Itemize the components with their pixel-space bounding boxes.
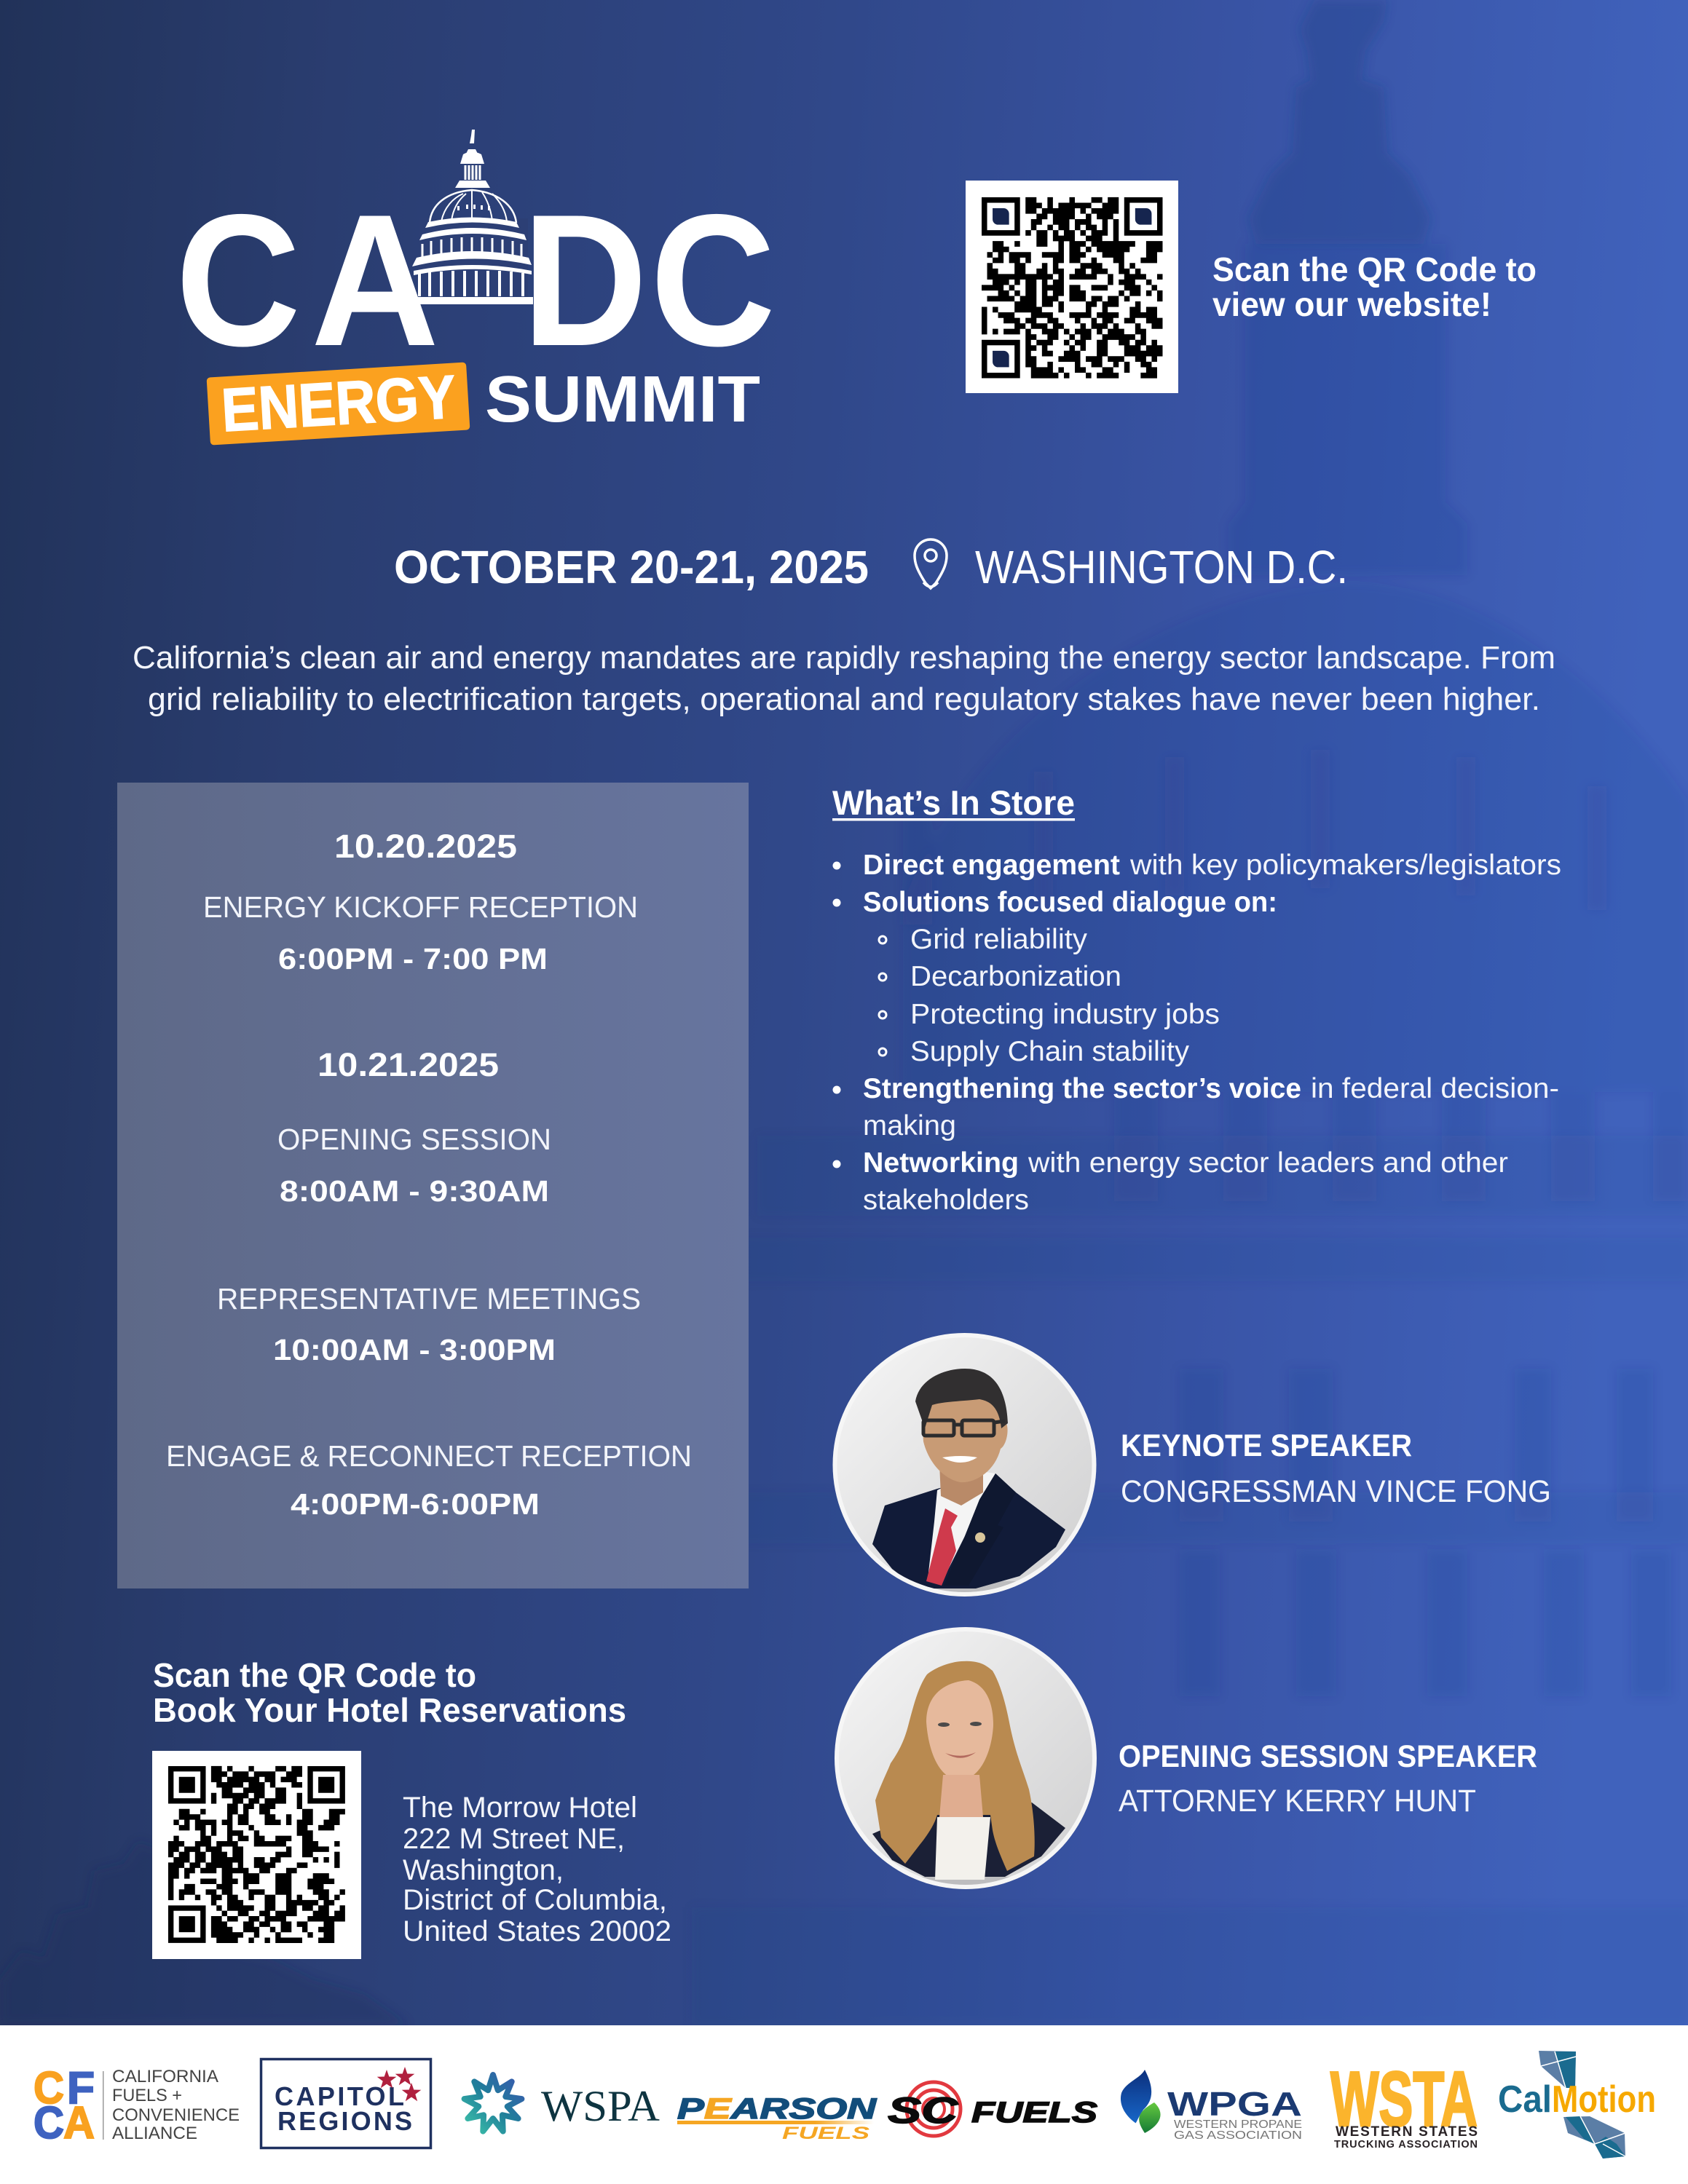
bullet list: Protecting industry jobs — [910, 999, 1220, 1030]
hotel address — [403, 1792, 671, 1947]
logo: Capitol Regions — [261, 2059, 431, 2148]
icon: location pin — [915, 539, 947, 588]
bullet list: making — [863, 1110, 956, 1142]
logo: WSTA: TRUCKING ASSOCIATION — [1334, 2139, 1478, 2151]
schedule: representative meetings — [217, 1282, 641, 1366]
schedule: October 20 kickoff: 6:00PM - 7:00 PM — [278, 942, 548, 976]
logo: CFCA: CONVENIENCE — [112, 2105, 240, 2125]
logo: WSTA: WESTERN STATES — [1336, 2124, 1478, 2140]
speaker: opening session: OPENING SESSION SPEAKER — [1119, 1739, 1537, 1774]
hotel address: 222 M Street NE, — [403, 1823, 625, 1855]
heading: What's In Store: What’s In Store — [832, 783, 1075, 822]
QR code: hotel — [152, 1751, 361, 1959]
portrait: Congressman Vince Fong — [830, 1333, 1100, 1610]
hotel heading: Book Your Hotel Reservations — [153, 1691, 626, 1729]
hotel address: United States 20002 — [403, 1915, 671, 1947]
logo letters DC: C — [650, 175, 776, 385]
logo: Capitol Regions: REGIONS — [277, 2106, 412, 2136]
schedule: October 20 kickoff — [203, 828, 638, 976]
bullet list: Solutions focused dialogue on: — [863, 887, 1277, 918]
logo: CA DC Energy Summit — [175, 130, 776, 446]
hotel heading: Scan the QR Code to — [153, 1656, 476, 1694]
bullet list: Grid reliability — [910, 924, 1088, 955]
bullet list: in federal decision- — [1311, 1073, 1559, 1104]
schedule: reception — [166, 1439, 692, 1521]
logo: CFCA: F — [67, 2063, 95, 2113]
speaker: opening session — [1119, 1739, 1537, 1819]
speaker: keynote — [1121, 1428, 1551, 1509]
bullet list: Networking — [863, 1147, 1019, 1179]
bullet list: Direct engagement — [863, 850, 1120, 881]
logo: Pearson Fuels: P E ARSON — [677, 2093, 877, 2125]
event location: WASHINGTON D.C. — [975, 541, 1348, 593]
logo: Capitol Regions: CAPITOL — [275, 2081, 404, 2111]
panel: sponsor footer — [0, 2025, 1688, 2184]
logo: SC Fuels — [888, 2082, 1097, 2136]
hotel address: The Morrow Hotel — [403, 1792, 637, 1824]
logo: WPGA — [1121, 2070, 1302, 2142]
logo: WSTA: WSTA — [1330, 2055, 1478, 2143]
bullet list: stakeholders — [863, 1184, 1029, 1216]
logo: CalMotion: Motion — [1552, 2078, 1656, 2121]
energy badge: ENERGY — [219, 363, 457, 444]
schedule: reception: 4:00PM-6:00PM — [291, 1487, 540, 1521]
hotel address: Washington, — [403, 1854, 564, 1886]
logo: CFCA — [33, 2063, 240, 2148]
icon: Capitol dome — [412, 130, 533, 304]
logo letters CA: C — [175, 175, 301, 385]
schedule: October 21 opening session: OPENING SESSION — [277, 1123, 551, 1156]
QR caption: website — [1212, 250, 1537, 323]
QR caption: website: Scan the QR Code to — [1212, 250, 1537, 288]
QR caption: website: view our website! — [1212, 285, 1491, 323]
bullet list: Strengthening the sector’s voice — [863, 1073, 1301, 1104]
logo: CalMotion: Cal — [1498, 2078, 1552, 2121]
logo: CalMotion — [1498, 2051, 1656, 2159]
schedule: October 20 kickoff: ENERGY KICKOFF RECEPTION — [203, 890, 638, 924]
logo letters DC: D — [522, 175, 647, 385]
QR code: website — [966, 181, 1178, 393]
logo letters DC — [522, 175, 776, 385]
bullet list: Supply Chain stability — [910, 1036, 1189, 1067]
schedule: reception: ENGAGE & RECONNECT RECEPTION — [166, 1439, 692, 1473]
logo: WSTA — [1330, 2055, 1478, 2151]
intro paragraph: grid reliability to electrification targets, operational and regulatory stakes have never been higher. — [148, 681, 1540, 717]
logo: SC Fuels: FUELS — [971, 2097, 1097, 2129]
hotel heading — [153, 1656, 626, 1729]
logo: CFCA: ALLIANCE — [112, 2124, 197, 2143]
hotel address: District of Columbia, — [403, 1884, 667, 1916]
logo letters CA: A — [311, 175, 439, 385]
logo: WPGA: WESTERN PROPANE — [1174, 2118, 1302, 2131]
schedule: October 20 kickoff: 10.20.2025 — [334, 828, 517, 865]
bullet list: with energy sector leaders and other — [1028, 1147, 1508, 1179]
logo: CFCA: A — [63, 2098, 95, 2148]
schedule: October 21 opening session: 8:00AM - 9:30AM — [280, 1174, 549, 1208]
bullet list: Decarbonization — [910, 961, 1121, 992]
portrait: Attorney Kerry Hunt — [830, 1627, 1100, 1906]
logo: Pearson Fuels: FUELS — [782, 2124, 869, 2143]
schedule: October 21 opening session — [277, 1046, 551, 1208]
summit wordmark: SUMMIT — [485, 363, 760, 436]
logo: CFCA: C — [33, 2098, 64, 2148]
panel: schedule — [117, 783, 749, 1588]
speaker: keynote: CONGRESSMAN VINCE FONG — [1121, 1474, 1551, 1509]
schedule: representative meetings: REPRESENTATIVE MEETINGS — [217, 1282, 641, 1315]
bullet list: with key policymakers/legislators — [1129, 850, 1561, 881]
event date: OCTOBER 20-21, 2025 — [394, 541, 869, 593]
schedule: October 21 opening session: 10.21.2025 — [318, 1046, 499, 1083]
logo letters CA — [175, 175, 439, 385]
intro paragraph — [133, 640, 1555, 717]
logo: WPGA: GAS ASSOCIATION — [1174, 2129, 1302, 2142]
logo: WPGA: WPGA — [1167, 2085, 1302, 2123]
logo: CFCA: C — [33, 2063, 64, 2113]
logo: SC Fuels: SC — [888, 2090, 958, 2131]
logo: Pearson Fuels — [677, 2093, 877, 2143]
logo: CFCA: FUELS + — [112, 2086, 182, 2105]
speaker: opening session: ATTORNEY KERRY HUNT — [1119, 1784, 1476, 1819]
bullet list — [833, 850, 1561, 1216]
intro paragraph: California’s clean air and energy mandates are rapidly reshaping the energy sector landscape. From — [133, 640, 1555, 676]
logo: WSPA: WSPA — [541, 2082, 660, 2130]
speaker: keynote: KEYNOTE SPEAKER — [1121, 1428, 1412, 1463]
schedule: representative meetings: 10:00AM - 3:00PM — [273, 1333, 556, 1366]
logo: WSPA — [465, 2075, 660, 2132]
logo: CFCA: CALIFORNIA — [112, 2067, 219, 2086]
